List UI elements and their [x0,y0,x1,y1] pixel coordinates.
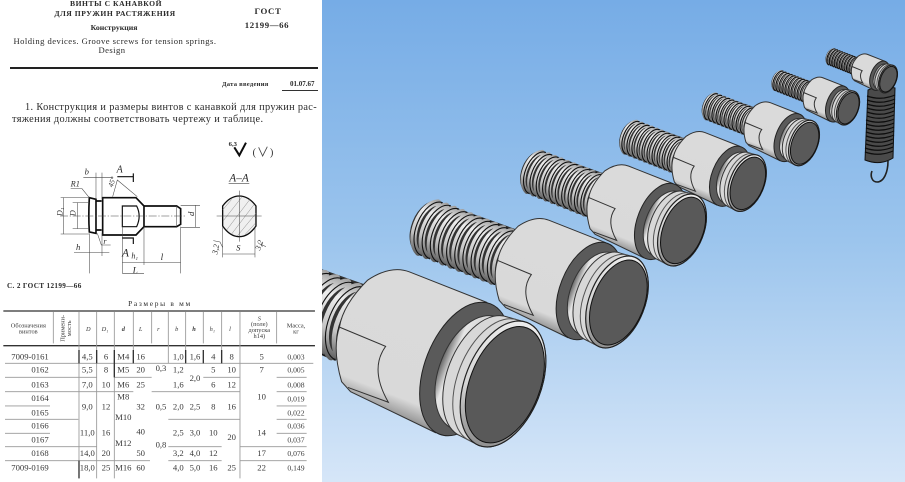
column d and L: М5 [117,365,129,375]
drawing labels: d [186,211,196,216]
column h1 and l: 16 [209,462,218,472]
column d and L: 40 [136,426,145,436]
roughness symbol: ( [253,147,256,158]
paragraph: тяжения должны соответствовать чертежу и таблице. [12,114,263,125]
row designations: 0166 [31,421,49,431]
row designations [11,351,49,472]
roughness symbol: ) [270,147,273,158]
row designations: 7009-0169 [11,462,49,472]
column r, b, h: 2,0 [173,401,184,411]
column S: 22 [257,462,266,472]
column h1 and l: 10 [209,427,218,437]
column S: 17 [257,448,267,458]
column S [257,351,267,472]
column r, b, h: 4,0 [190,448,200,458]
column D and D1: 10 [102,380,110,390]
column D and D1: 20 [102,448,110,458]
column h1 and l: 6 [211,380,216,390]
column r, b, h: 1,6 [190,351,201,361]
column D and D1: 25 [102,462,110,472]
column r, b, h: 1,6 [173,380,184,390]
column r, b, h: 0,5 [156,401,166,411]
row designations: 7009-0161 [11,351,49,361]
table header [11,315,306,342]
table header: L [138,326,143,333]
column S: 7 [259,365,264,375]
table header: b [175,326,178,333]
row designations: 0163 [31,380,49,390]
spring hook [871,161,888,182]
white mask left of scene [0,0,322,482]
drawing labels: L [132,266,138,276]
screw 6 [765,61,864,129]
table header: Масса, [287,322,306,329]
sky gradient background [322,0,905,482]
column D and D1: 18,0 [80,462,95,472]
column d and L: М12 [115,438,132,448]
document title [54,0,176,18]
roughness symbol: 6,3 [229,141,238,148]
table grid [3,311,315,478]
table header: D [85,326,91,333]
screw 3 [508,130,717,275]
column d and L [115,351,146,472]
drawing labels: b [85,167,90,177]
column d and L: 50 [136,448,145,458]
column h1 and l: 10 [227,365,236,375]
column mass: 0,005 [287,366,305,375]
column D and D1 [80,351,111,472]
drawing labels: 45° [106,175,118,188]
column r, b, h: 3,2 [173,448,184,458]
column h1 and l [209,351,237,472]
column d and L: 60 [136,462,145,472]
column D and D1: 9,0 [82,401,93,411]
table header: S [258,316,262,323]
column mass: 0,003 [287,352,305,361]
column d and L: М16 [115,462,132,472]
screw 1 (largest) [197,209,564,463]
drawing labels: h [76,242,80,252]
drawing labels: h₁ [131,252,138,261]
column D and D1: 11,0 [80,427,95,437]
column h1 and l: 20 [227,432,236,442]
row designations: 0167 [31,435,49,445]
drawing labels [56,165,196,276]
column mass: 0,037 [287,436,305,445]
row designations: 0162 [31,365,49,375]
dimensions table [3,311,315,478]
drawing labels: l [161,253,164,263]
column S: 5 [259,351,264,361]
column D and D1: 7,0 [82,380,93,390]
table header: h14) [254,333,265,340]
column r, b, h: 1,2 [173,365,184,375]
drawing labels: A [116,165,124,176]
document title: ДЛЯ ПРУЖИН РАСТЯЖЕНИЯ [54,9,176,18]
subtitle: Конструкция [91,23,138,32]
column h1 and l: 4 [211,351,216,361]
row designations: 0165 [31,407,49,417]
column r, b, h: 3,0 [190,427,200,437]
introduction date: 01.07.67 [290,80,315,88]
section A-A [210,173,266,257]
column d and L: М8 [117,391,129,401]
column d and L: 25 [136,380,145,390]
paragraph: 1. Конструкция и размеры винтов с канавкой для пружин рас- [25,102,317,113]
header rule [10,67,318,69]
column r, b, h: 0,3 [156,363,166,373]
column h1 and l: 8 [211,401,215,411]
English title [14,36,216,55]
column h1 and l: 12 [227,380,236,390]
column r, b, h: 5,0 [190,462,200,472]
column r, b, h [156,351,201,472]
column mass: 0,036 [287,422,305,431]
screw 2 [394,174,662,360]
column mass: 0,022 [287,408,305,417]
screw 7 (smallest, holding spring) [821,40,901,96]
table header: r [157,326,160,333]
column S: 10 [257,391,266,401]
row designations: 0168 [31,448,49,458]
column r, b, h: 0,8 [156,440,166,450]
drawing labels: R1 [70,180,80,189]
English title: Holding devices. Groove screws for tension springs. [14,36,216,46]
table header: (поле) [251,321,268,328]
screw side view [60,198,187,235]
English title: Design [98,45,126,55]
column D and D1: 4,5 [82,351,93,361]
column D and D1: 6 [104,351,109,361]
drawing labels: D [68,210,77,217]
introduction date [222,80,318,91]
table title: Размеры в мм [128,299,192,308]
column d and L: 32 [136,401,145,411]
table header: l [229,326,231,333]
technical drawing [56,141,273,276]
table header: h₁ [210,326,215,333]
row designations: 0164 [31,393,49,403]
table header: винтов [19,328,38,335]
GOST number: 12199—66 [245,20,289,30]
column mass: 0,076 [287,449,305,458]
column D and D1: 12 [102,401,110,411]
column D and D1: 5,5 [82,365,93,375]
spring coils [865,86,895,163]
drawing labels: r [103,237,107,246]
column d and L: 16 [136,351,146,361]
drawing labels: D₁ [56,207,65,217]
table header: допуска [249,327,270,334]
section A-A: 3,2 [253,239,265,252]
section A-A: S [236,243,241,253]
column r, b, h: 2,5 [173,427,184,437]
GOST number [245,6,289,30]
screw 5 [694,80,826,171]
column mass [287,352,305,472]
column D and D1: 14,0 [80,448,95,458]
section A-A: A–A [228,173,249,185]
column mass: 0,019 [287,395,305,404]
table header: h [192,326,196,333]
column S: 14 [257,427,267,437]
roughness symbol [229,141,273,158]
table header: Примени- [59,315,66,342]
column r, b, h: 2,0 [190,373,200,383]
column mass: 0,149 [287,463,305,472]
panel: GOST standard page [3,0,318,478]
introduction date: Дата введения [222,81,269,88]
page reference: С. 2 ГОСТ 12199—66 [7,282,82,290]
column d and L: М4 [117,351,130,361]
column D and D1: 8 [104,365,108,375]
column d and L: М10 [115,412,132,422]
GOST number: ГОСТ [255,6,281,16]
table header: кг [293,328,299,335]
column mass: 0,008 [287,381,305,390]
column d and L: М6 [117,380,130,390]
table header: Обозначения [11,322,46,329]
table header: d [122,326,126,333]
column h1 and l: 8 [229,351,234,361]
column r, b, h: 4,0 [173,462,184,472]
dimension lines [61,173,200,273]
column r, b, h: 2,5 [190,401,200,411]
column r, b, h: 1,0 [173,351,184,361]
section A-A: 3,2 [210,244,221,256]
column h1 and l: 25 [227,462,236,472]
table header: D₁ [101,326,108,333]
spring [865,86,895,182]
column h1 and l: 12 [209,448,218,458]
drawing labels: A [121,248,129,260]
table header: мость [66,320,73,336]
column h1 and l: 5 [211,365,215,375]
paragraph [12,102,317,125]
column d and L: 20 [136,365,145,375]
column h1 and l: 16 [227,401,237,411]
screw 4 [609,104,774,219]
column D and D1: 16 [102,427,111,437]
